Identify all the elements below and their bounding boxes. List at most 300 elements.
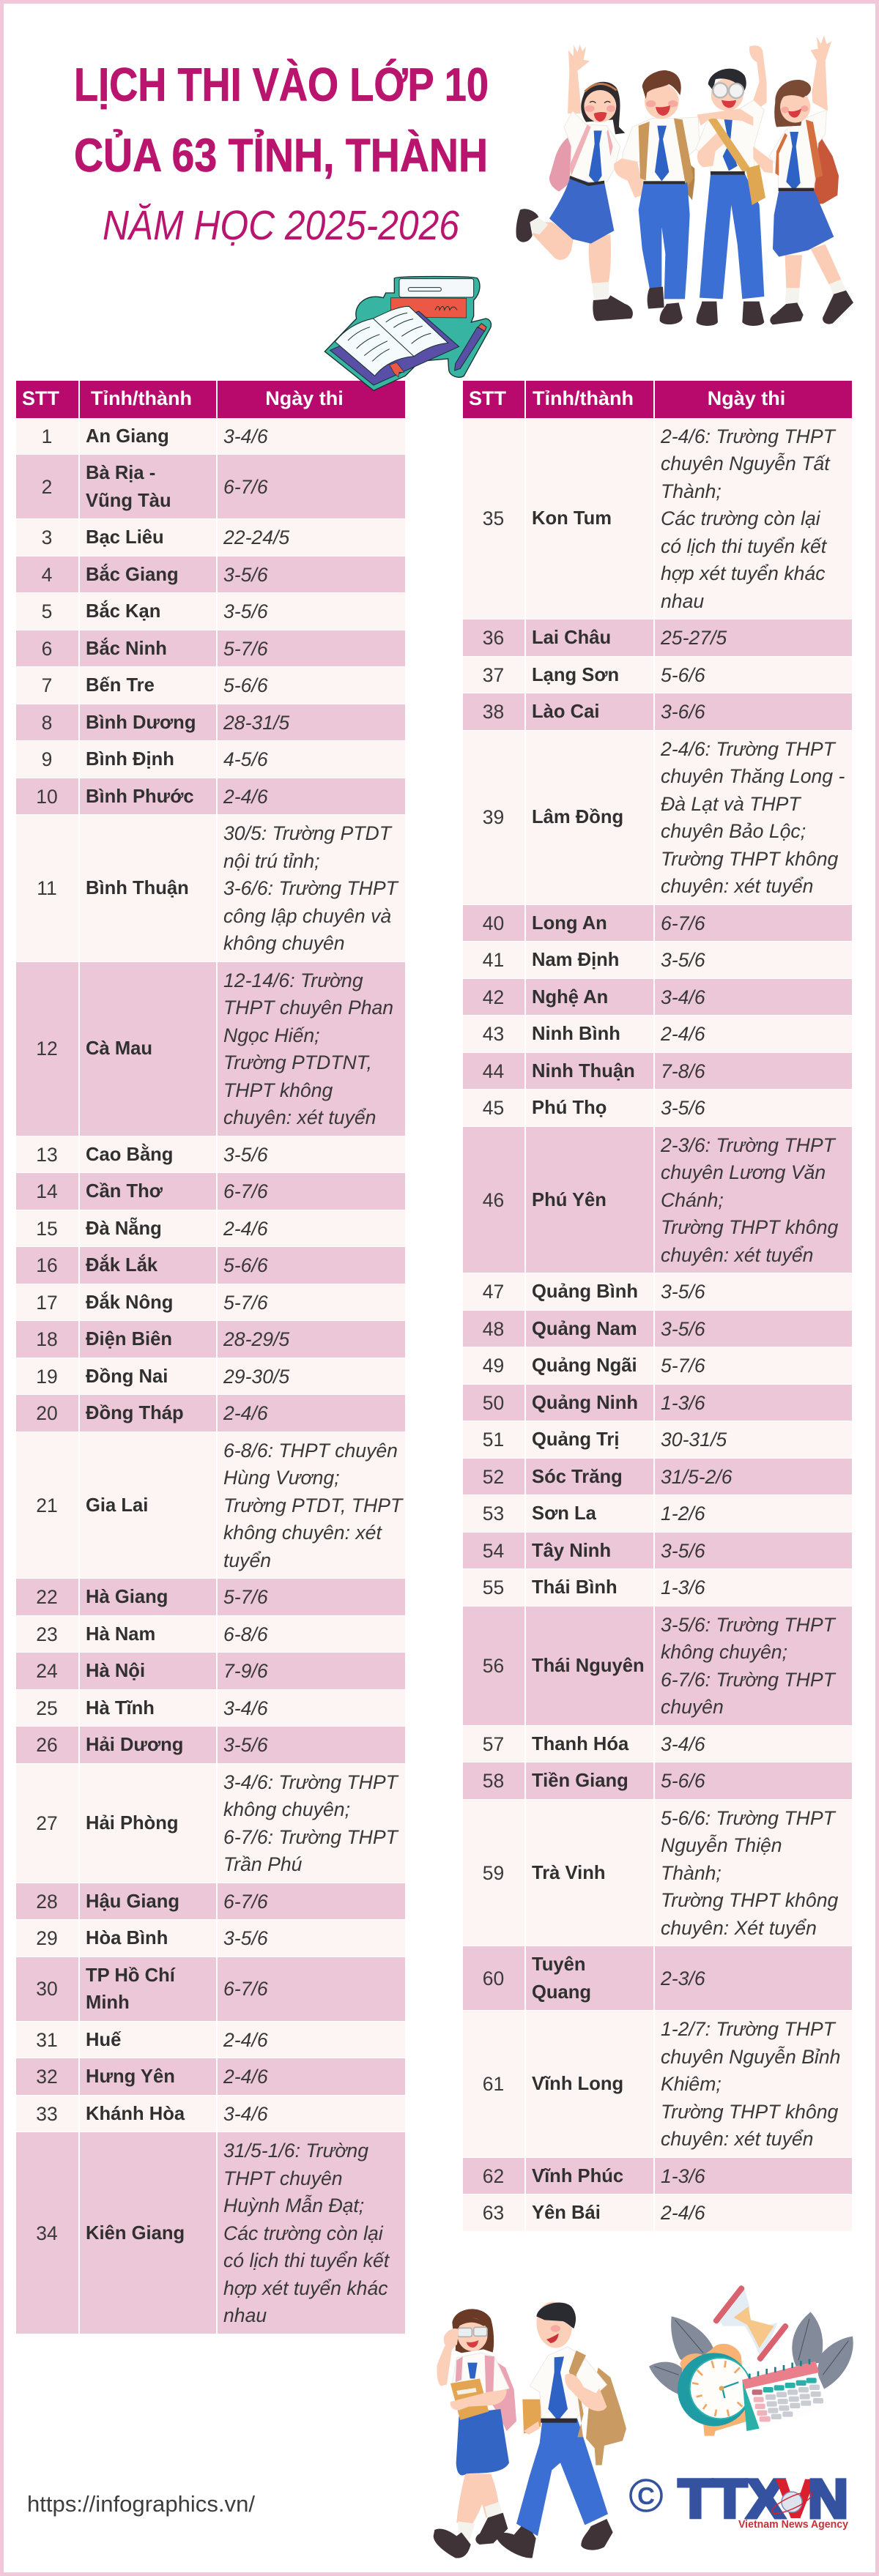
row 11: 3-6/6: Trường THPT xyxy=(223,877,398,899)
row 42: 42 xyxy=(483,986,504,1008)
row 26: 26 xyxy=(36,1734,58,1756)
table: provinces 35 to 63 xyxy=(463,381,852,2231)
open book pages xyxy=(335,306,448,376)
row 61: chuyên: xét tuyển xyxy=(661,2128,813,2150)
row 14: 14 xyxy=(36,1180,58,1202)
row 55: 55 xyxy=(483,1577,504,1598)
row 56: không chuyên; xyxy=(661,1641,787,1663)
row 49: 49 xyxy=(483,1355,504,1377)
row 5: 5 xyxy=(42,600,52,622)
row 40: Long An xyxy=(532,912,607,933)
row 39 xyxy=(463,731,852,905)
student: girl with glasses and books xyxy=(434,2309,516,2558)
row 52: 31/5-2/6 xyxy=(661,1466,732,1488)
row 8: Bình Dương xyxy=(86,712,196,732)
row 38: 38 xyxy=(483,701,504,723)
row 14: Cần Thơ xyxy=(86,1181,163,1202)
row 6: 5-7/6 xyxy=(223,637,268,659)
row 45: 45 xyxy=(483,1097,504,1119)
row 43 xyxy=(463,1016,852,1053)
student: girl with orange backpack xyxy=(769,35,853,324)
row 28: Hậu Giang xyxy=(86,1891,179,1911)
row 9: 9 xyxy=(42,748,52,770)
row 15: 2-4/6 xyxy=(223,1217,268,1239)
row 37 xyxy=(463,656,852,693)
row 25: 25 xyxy=(36,1697,58,1719)
red book xyxy=(390,298,467,318)
row 35: nhau xyxy=(661,590,704,612)
row 32 xyxy=(16,2058,405,2096)
row 51 xyxy=(463,1421,852,1459)
row 41: 3-5/6 xyxy=(661,949,705,971)
row 12 xyxy=(16,962,405,1136)
row 55: 1-3/6 xyxy=(661,1577,705,1598)
row 25: Hà Tĩnh xyxy=(86,1697,155,1718)
row 19 xyxy=(16,1358,405,1395)
row 62: Vĩnh Phúc xyxy=(532,2166,623,2186)
row 33: Khánh Hòa xyxy=(86,2103,185,2123)
row 8: 28-31/5 xyxy=(223,712,289,734)
row 60 xyxy=(463,1946,852,2011)
row 22: 5-7/6 xyxy=(223,1586,268,1608)
row 47 xyxy=(463,1273,852,1311)
row 27: 6-7/6: Trường THPT xyxy=(223,1826,398,1848)
table header: Tỉnh/thành xyxy=(91,387,192,409)
row 56: 6-7/6: Trường THPT xyxy=(661,1668,835,1690)
row 22: 22 xyxy=(36,1586,58,1608)
row 59: 5-6/6: Trường THPT xyxy=(661,1807,835,1829)
row 12: chuyên: xét tuyển xyxy=(223,1106,376,1128)
calendar xyxy=(742,2359,826,2431)
row 21: Hùng Vương; xyxy=(223,1467,340,1489)
row 57: 57 xyxy=(483,1732,504,1754)
row 3: Bạc Liêu xyxy=(86,527,164,548)
row 13: 3-5/6 xyxy=(223,1144,268,1166)
row 58: 58 xyxy=(483,1770,504,1792)
row 48: 48 xyxy=(483,1318,504,1340)
row 31: Huế xyxy=(86,2030,121,2050)
row 19: 29-30/5 xyxy=(223,1365,289,1387)
row 11: 30/5: Trường PTDT xyxy=(223,822,391,844)
row 26: Hải Dương xyxy=(86,1735,183,1755)
row 7: Bến Tre xyxy=(86,675,155,696)
row 39: Trường THPT không xyxy=(661,848,838,870)
source url: https://infographics.vn/ xyxy=(27,2491,255,2517)
row 24: 24 xyxy=(36,1660,58,1682)
row 59: chuyên: Xét tuyển xyxy=(661,1917,817,1939)
row 35: hợp xét tuyển khác xyxy=(661,562,826,584)
row 49: Quảng Ngãi xyxy=(532,1355,637,1376)
row 2 xyxy=(16,455,405,519)
row 2: Bà Rịa - xyxy=(86,463,155,483)
row 56 xyxy=(463,1607,852,1725)
row 41: 41 xyxy=(483,949,504,971)
row 20: Đồng Tháp xyxy=(86,1403,184,1423)
row 34: Kiên Giang xyxy=(86,2223,185,2244)
row 44: 7-8/6 xyxy=(661,1060,705,1082)
row 26 xyxy=(16,1727,405,1763)
table header: Ngày thi xyxy=(708,387,785,409)
row 58 xyxy=(463,1762,852,1800)
illustration: four cheering students xyxy=(516,35,853,326)
row 42 xyxy=(463,978,852,1016)
row 11: nội trú tỉnh; xyxy=(223,849,320,871)
row 46: 46 xyxy=(483,1189,504,1211)
arm across shoulders xyxy=(697,108,753,126)
row 34: Các trường còn lại xyxy=(223,2222,383,2244)
row 47: 47 xyxy=(483,1281,504,1303)
row 37: 37 xyxy=(483,663,504,685)
row 62: 62 xyxy=(483,2164,504,2186)
row 4: 3-5/6 xyxy=(223,564,268,586)
row 63 xyxy=(463,2195,852,2232)
row 32: Hưng Yên xyxy=(86,2066,175,2087)
row 56: 3-5/6: Trường THPT xyxy=(661,1614,835,1636)
row 55 xyxy=(463,1569,852,1607)
row 17 xyxy=(16,1284,405,1321)
row 33 xyxy=(16,2096,405,2132)
row 28: 6-7/6 xyxy=(223,1891,268,1913)
row 59 xyxy=(463,1800,852,1946)
row 60: Quang xyxy=(532,1981,591,2002)
row 39: Lâm Đồng xyxy=(532,807,623,827)
row 54: Tây Ninh xyxy=(532,1541,611,1561)
row 61: 61 xyxy=(483,2073,504,2095)
row 36: Lai Châu xyxy=(532,628,611,648)
row 7: 5-6/6 xyxy=(223,674,268,696)
row 54 xyxy=(463,1532,852,1569)
row 38: Lào Cai xyxy=(532,701,599,722)
row 42: 3-4/6 xyxy=(661,986,705,1008)
row 40: 40 xyxy=(483,912,504,934)
row 37: 5-6/6 xyxy=(661,663,705,685)
row 46 xyxy=(463,1126,852,1273)
row 60: 2-3/6 xyxy=(661,1968,705,1989)
row 24 xyxy=(16,1653,405,1690)
row 40 xyxy=(463,905,852,942)
row 10: Bình Phước xyxy=(86,786,194,807)
row 6 xyxy=(16,630,405,667)
row 35: Kon Tum xyxy=(532,508,612,529)
row 27: không chuyên; xyxy=(223,1798,350,1820)
row 3 xyxy=(16,519,405,556)
row 1: An Giang xyxy=(86,426,169,447)
row 5 xyxy=(16,593,405,630)
row 12: Trường PTDTNT, xyxy=(223,1051,372,1073)
table header: STT xyxy=(469,387,506,409)
row 9: 4-5/6 xyxy=(223,748,268,770)
row 14: 6-7/6 xyxy=(223,1180,268,1202)
row 8: 8 xyxy=(42,712,52,734)
row 25: 3-4/6 xyxy=(223,1697,268,1719)
row 58: 5-6/6 xyxy=(661,1770,705,1792)
row 57: Thanh Hóa xyxy=(532,1734,628,1754)
row 38: 3-6/6 xyxy=(661,701,705,723)
table header: Tỉnh/thành xyxy=(533,387,634,409)
row 46: Chánh; xyxy=(661,1189,724,1211)
row 30: 6-7/6 xyxy=(223,1978,268,2000)
row 59: Nguyễn Thiện xyxy=(661,1834,782,1856)
row 39: chuyên Thăng Long - xyxy=(661,765,845,787)
row 50 xyxy=(463,1384,852,1421)
illustration: two students walking xyxy=(434,2302,626,2558)
row 10: 2-4/6 xyxy=(223,785,268,807)
row 44 xyxy=(463,1053,852,1090)
row 34 xyxy=(16,2132,405,2334)
row 27: 3-4/6: Trường THPT xyxy=(223,1771,398,1793)
row 39: 2-4/6: Trường THPT xyxy=(661,738,835,760)
row 52: Sóc Trăng xyxy=(532,1466,623,1486)
row 1 xyxy=(16,417,405,455)
row 33: 33 xyxy=(36,2103,58,2125)
table: provinces 1 to 34 xyxy=(16,381,405,2334)
row 3: 3 xyxy=(42,526,52,548)
row 10: 10 xyxy=(36,785,58,807)
row 20: 2-4/6 xyxy=(223,1402,268,1424)
row 32: 32 xyxy=(36,2066,58,2088)
row 63: 2-4/6 xyxy=(661,2202,705,2224)
table header xyxy=(463,381,852,417)
row 52 xyxy=(463,1459,852,1495)
row 1: 1 xyxy=(42,425,52,447)
row 63: Yên Bái xyxy=(532,2203,601,2223)
student: girl with pink backpack xyxy=(516,45,633,321)
row 59: Trường THPT không xyxy=(661,1889,838,1911)
table header: STT xyxy=(22,387,59,409)
row 49: 5-7/6 xyxy=(661,1355,705,1377)
row 35: có lịch thi tuyển kết xyxy=(661,535,826,556)
row 9 xyxy=(16,741,405,778)
row 53 xyxy=(463,1495,852,1532)
row 28 xyxy=(16,1883,405,1920)
row 22: Hà Giang xyxy=(86,1587,168,1607)
row 23: 6-8/6 xyxy=(223,1623,268,1645)
logo wordmark: V xyxy=(776,2468,815,2529)
student: boy with glasses and shoulder bag xyxy=(696,45,773,326)
copyright mark xyxy=(631,2480,661,2511)
row 16: Đắk Lắk xyxy=(86,1255,157,1276)
row 62 xyxy=(463,2157,852,2195)
row 31: 31 xyxy=(36,2028,58,2050)
row 4: 4 xyxy=(42,564,52,586)
row 18: 18 xyxy=(36,1328,58,1350)
row 35: Thành; xyxy=(661,480,722,502)
row 52: 52 xyxy=(483,1466,504,1488)
white book xyxy=(399,279,474,297)
row 29: 29 xyxy=(36,1927,58,1949)
row 17: 17 xyxy=(36,1292,58,1314)
row 59: 59 xyxy=(483,1861,504,1883)
row 30 xyxy=(16,1957,405,2021)
row 62: 1-3/6 xyxy=(661,2164,705,2186)
row 60: Tuyên xyxy=(532,1954,585,1975)
row 2: Vũng Tàu xyxy=(86,491,171,511)
row 39: 39 xyxy=(483,806,504,828)
row 5: Bắc Kạn xyxy=(86,601,160,622)
row 50: Quảng Ninh xyxy=(532,1393,638,1413)
row 24: Hà Nội xyxy=(86,1661,145,1681)
row 36: 25-27/5 xyxy=(661,627,727,649)
row 53: 53 xyxy=(483,1503,504,1525)
row 4 xyxy=(16,556,405,593)
row 34: 31/5-1/6: Trường xyxy=(223,2140,368,2162)
row 53: Sơn La xyxy=(532,1503,596,1524)
row 15 xyxy=(16,1210,405,1247)
row 27: Hải Phòng xyxy=(86,1813,179,1834)
row 34: nhau xyxy=(223,2304,267,2326)
row 16: 5-6/6 xyxy=(223,1254,268,1276)
row 34: hợp xét tuyển khác xyxy=(223,2277,388,2299)
row 39: chuyên: xét tuyển xyxy=(661,875,813,897)
row 24: 7-9/6 xyxy=(223,1660,268,1682)
row 43: 43 xyxy=(483,1023,504,1045)
row 54: 3-5/6 xyxy=(661,1539,705,1561)
row 2: 2 xyxy=(42,476,52,498)
row 26: 3-5/6 xyxy=(223,1734,268,1756)
row 39: chuyên Bảo Lộc; xyxy=(661,820,806,842)
row 1: 3-4/6 xyxy=(223,425,268,447)
pencil xyxy=(455,327,485,371)
row 19: 19 xyxy=(36,1365,58,1387)
row 18: Điện Biên xyxy=(86,1329,172,1350)
table header: Ngày thi xyxy=(265,387,344,409)
row 27: 27 xyxy=(36,1812,58,1834)
row 35: 35 xyxy=(483,507,504,529)
row 55: Thái Bình xyxy=(532,1577,617,1598)
logo wordmark xyxy=(678,2468,848,2529)
row 50: 1-3/6 xyxy=(661,1391,705,1413)
row 56: chuyên xyxy=(661,1696,724,1718)
row 21: tuyển xyxy=(223,1549,271,1571)
purple book cover xyxy=(330,311,459,385)
row 9: Bình Định xyxy=(86,749,174,770)
row 46: Phú Yên xyxy=(532,1189,607,1210)
row 50: 50 xyxy=(483,1391,504,1413)
row 40: 6-7/6 xyxy=(661,912,705,934)
title line 1: LỊCH THI VÀO LỚP 10 xyxy=(74,59,489,111)
row 61: Trường THPT không xyxy=(661,2100,838,2122)
row 46: chuyên: xét tuyển xyxy=(661,1243,813,1265)
row 28: 28 xyxy=(36,1891,58,1913)
row 27: Trần Phú xyxy=(223,1853,302,1875)
hourglass xyxy=(712,2285,790,2362)
row 33: 3-4/6 xyxy=(223,2103,268,2125)
row 58: Tiền Giang xyxy=(532,1771,628,1791)
row 15: 15 xyxy=(36,1217,58,1239)
row 37: Lạng Sơn xyxy=(532,665,619,685)
row 17: Đắk Nông xyxy=(86,1292,173,1312)
row 31: 2-4/6 xyxy=(223,2028,268,2050)
row 51: 30-31/5 xyxy=(661,1429,727,1451)
row 12: THPT không xyxy=(223,1079,333,1101)
row 35: 2-4/6: Trường THPT xyxy=(661,425,835,447)
row 7: 7 xyxy=(42,674,52,696)
row 12: 12-14/6: Trường xyxy=(223,969,363,991)
row 30: Minh xyxy=(86,1992,130,2013)
row 56: 56 xyxy=(483,1655,504,1677)
row 57: 3-4/6 xyxy=(661,1732,705,1754)
row 21: Gia Lai xyxy=(86,1495,148,1516)
row 42: Nghệ An xyxy=(532,987,608,1008)
row 61: Khiêm; xyxy=(661,2073,722,2095)
row 12: Cà Mau xyxy=(86,1038,152,1059)
row 21: 6-8/6: THPT chuyên xyxy=(223,1440,398,1462)
row 10 xyxy=(16,778,405,815)
row 48 xyxy=(463,1311,852,1347)
row 29 xyxy=(16,1920,405,1957)
row 4: Bắc Giang xyxy=(86,564,179,584)
row 11: không chuyên xyxy=(223,932,345,954)
row 11 xyxy=(16,815,405,962)
row 21: không chuyên: xét xyxy=(223,1522,382,1544)
row 16 xyxy=(16,1247,405,1284)
row 13: Cao Bằng xyxy=(86,1144,173,1164)
row 20 xyxy=(16,1395,405,1432)
row 18: 28-29/5 xyxy=(223,1328,289,1350)
row 43: 2-4/6 xyxy=(661,1023,705,1045)
row 34: THPT chuyên xyxy=(223,2167,343,2189)
row 44: Ninh Thuận xyxy=(532,1060,635,1081)
row 30: 30 xyxy=(36,1978,58,2000)
row 63: 63 xyxy=(483,2202,504,2224)
row 12: 12 xyxy=(36,1038,58,1060)
row 46: Trường THPT không xyxy=(661,1216,838,1238)
title line 2: CỦA 63 TỈNH, THÀNH xyxy=(74,128,488,182)
illustration: open book, stacked books and pencil xyxy=(324,275,492,391)
row 12: Ngọc Hiến; xyxy=(223,1024,320,1046)
row 41 xyxy=(463,942,852,978)
row 27 xyxy=(16,1763,405,1883)
row 21: 21 xyxy=(36,1494,58,1516)
row 46: 2-3/6: Trường THPT xyxy=(661,1133,835,1155)
row 29: Hòa Bình xyxy=(86,1928,168,1948)
row 34: Huỳnh Mẫn Đạt; xyxy=(223,2195,364,2216)
table header xyxy=(16,381,405,417)
row 7 xyxy=(16,667,405,704)
row 41: Nam Định xyxy=(532,950,619,970)
row 22 xyxy=(16,1579,405,1615)
sticker background xyxy=(324,277,491,390)
row 44: 44 xyxy=(483,1060,504,1082)
row 61: Vĩnh Long xyxy=(532,2074,623,2094)
row 45 xyxy=(463,1090,852,1126)
logo wordmark: TTX xyxy=(678,2468,785,2529)
row 11: 11 xyxy=(37,877,57,899)
alarm clock xyxy=(678,2344,751,2436)
row 12: THPT chuyên Phan xyxy=(223,997,393,1019)
row 49 xyxy=(463,1347,852,1384)
row 15: Đà Nẵng xyxy=(86,1218,162,1239)
row 31 xyxy=(16,2021,405,2058)
row 19: Đồng Nai xyxy=(86,1366,168,1387)
row 13: 13 xyxy=(36,1144,58,1166)
row 6: 6 xyxy=(42,637,52,659)
row 30: TP Hồ Chí xyxy=(86,1965,175,1986)
row 47: Quảng Bình xyxy=(532,1281,638,1302)
row 3: 22-24/5 xyxy=(223,526,289,548)
row 29: 3-5/6 xyxy=(223,1927,268,1949)
subtitle: NĂM HỌC 2025-2026 xyxy=(103,202,459,249)
copyright logo: TTXVN xyxy=(629,2468,848,2531)
row 23 xyxy=(16,1615,405,1653)
row 59: Thành; xyxy=(661,1861,722,1883)
row 48: Quảng Nam xyxy=(532,1318,637,1339)
row 5: 3-5/6 xyxy=(223,600,268,622)
title xyxy=(74,59,489,249)
row 38 xyxy=(463,693,852,731)
row 17: 5-7/6 xyxy=(223,1292,268,1314)
row 36: 36 xyxy=(483,627,504,649)
